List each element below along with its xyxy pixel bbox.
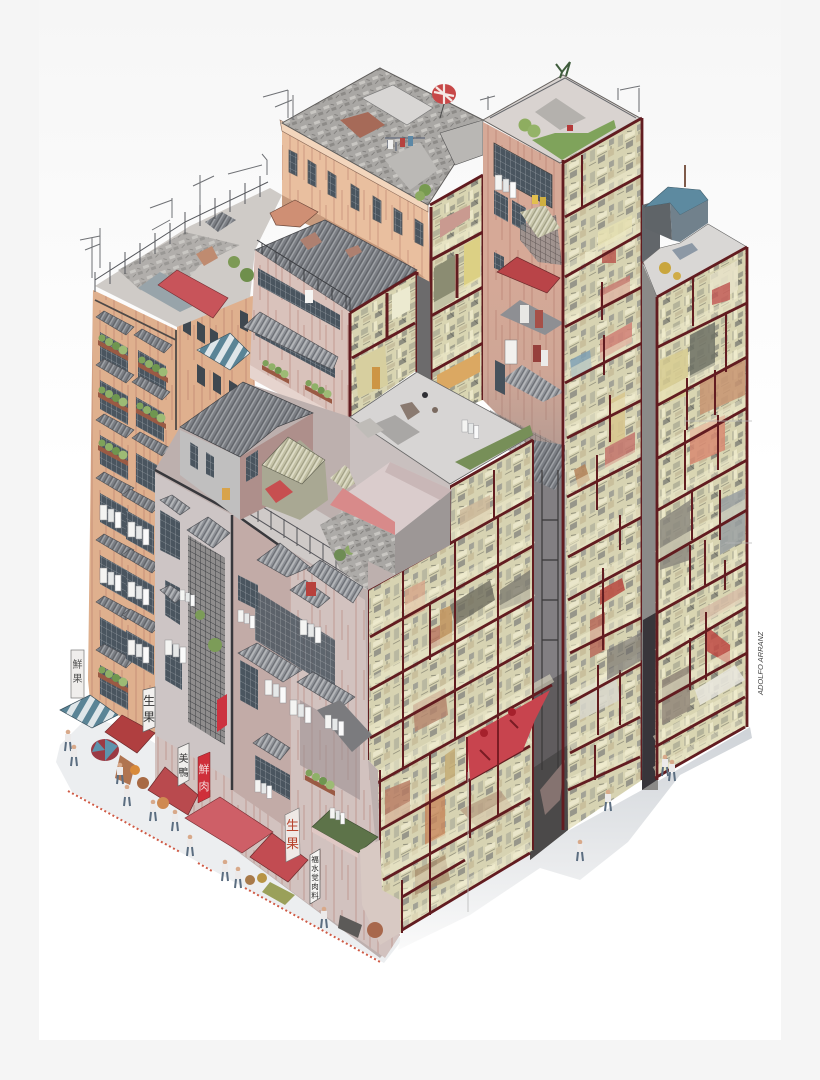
shop sign: small red xyxy=(217,694,227,732)
tower one windows xyxy=(289,150,423,246)
shop sign: red 鮮肉: 鮮 xyxy=(198,762,210,776)
window column two with awnings xyxy=(122,329,172,675)
dark alley shaft between blocks xyxy=(530,440,568,860)
right block roof xyxy=(643,224,747,297)
left tower roof terrace xyxy=(95,176,282,327)
furniture accents xyxy=(385,495,530,895)
shop sign: white tall: 美 xyxy=(178,752,188,765)
red awning two xyxy=(148,767,198,815)
street people xyxy=(65,730,675,928)
pale corrugated shed xyxy=(262,437,360,520)
striped blue market awning xyxy=(60,695,118,728)
red awning three xyxy=(250,833,308,882)
red roof awning xyxy=(158,270,228,318)
red and blue street umbrella xyxy=(91,739,119,761)
street-level cut-away shop xyxy=(360,840,400,945)
ground shadow: alley side xyxy=(398,727,752,950)
shop sign: 生果 lower: 果 xyxy=(286,836,299,851)
tower one roof xyxy=(282,68,483,205)
shop sign: 生果 lower xyxy=(285,808,300,862)
street stalls and produce xyxy=(115,755,383,938)
shop sign: 生果 lower: 生 xyxy=(286,818,299,833)
small peach shed roof xyxy=(270,200,318,227)
mid rooftop terrace xyxy=(350,372,533,575)
shop sign: vertical black characters: 水 xyxy=(311,863,319,873)
balcony plants xyxy=(195,610,335,796)
shop sign: red 鮮肉 xyxy=(198,752,210,803)
lower pink gray complex wall xyxy=(155,470,400,958)
upper tan wall windows xyxy=(183,310,248,395)
leader lines xyxy=(468,421,752,912)
railed walkway and terrace clutter xyxy=(232,490,368,590)
hanging laundry xyxy=(165,582,344,798)
furniture accents xyxy=(570,215,635,720)
blue striped awning xyxy=(197,333,250,370)
shop sign: red 鮮肉: 肉 xyxy=(198,780,210,793)
antennas xyxy=(80,86,640,278)
tower two red awning xyxy=(497,257,560,293)
gray house with corrugated roof xyxy=(180,382,313,520)
rooftop umbrella xyxy=(432,84,456,118)
large pink market awning xyxy=(185,797,273,853)
tower two balconies xyxy=(490,300,564,480)
gray awnings xyxy=(160,495,363,760)
tower one cut-away rooms xyxy=(430,175,483,420)
shop sign: left white xyxy=(71,650,84,698)
balcony iron cages xyxy=(160,510,360,800)
shop sign: vertical black characters: 肉 xyxy=(311,881,319,891)
pink terrace roof xyxy=(330,462,452,575)
shop sign: vertical black characters: 觉 xyxy=(311,872,319,882)
shop sign: vertical black characters xyxy=(310,849,320,904)
green balcony garden xyxy=(312,808,378,858)
rooftop blue shack xyxy=(645,165,708,242)
tower one peach wall xyxy=(280,120,430,285)
author credit: ADOLFO ARRANZ xyxy=(756,631,765,696)
shop sign: 生果 upper: 生 xyxy=(143,694,155,708)
window column one with awnings xyxy=(96,311,134,710)
shop sign: vertical black characters: 福 xyxy=(311,855,319,864)
shop sign: left white: 果 xyxy=(72,673,82,685)
front block cut-away rooms xyxy=(367,440,552,933)
furniture accents xyxy=(660,260,745,725)
left tan tower wall xyxy=(88,290,255,735)
middle block cut-away rooms xyxy=(563,118,643,830)
shop sign: left white: 鮮 xyxy=(72,658,82,671)
lower complex base fill xyxy=(155,382,450,958)
dotted street boundary line xyxy=(68,791,382,963)
ground shadow: street side xyxy=(56,715,402,963)
shop sign: 生果 upper xyxy=(143,687,155,732)
shop sign: white tall: 鴨 xyxy=(178,766,188,779)
shop sign: 生果 upper: 果 xyxy=(143,710,155,724)
right block stairwell xyxy=(642,200,660,790)
roof railing xyxy=(95,176,268,292)
tower two pink wall xyxy=(483,122,565,520)
red awning one xyxy=(105,715,155,753)
upper small cut-away rooms xyxy=(350,272,417,417)
tower two roof garden xyxy=(483,62,640,163)
red-lit room xyxy=(467,690,550,780)
shaft between upper block and tower one xyxy=(417,275,431,395)
shop sign: vertical black characters: 料 xyxy=(311,890,319,900)
upper gray corrugated roof xyxy=(255,220,417,312)
right block cut-away rooms xyxy=(655,247,747,780)
shop sign: white tall xyxy=(178,743,189,786)
pink upper building wall xyxy=(243,250,350,440)
